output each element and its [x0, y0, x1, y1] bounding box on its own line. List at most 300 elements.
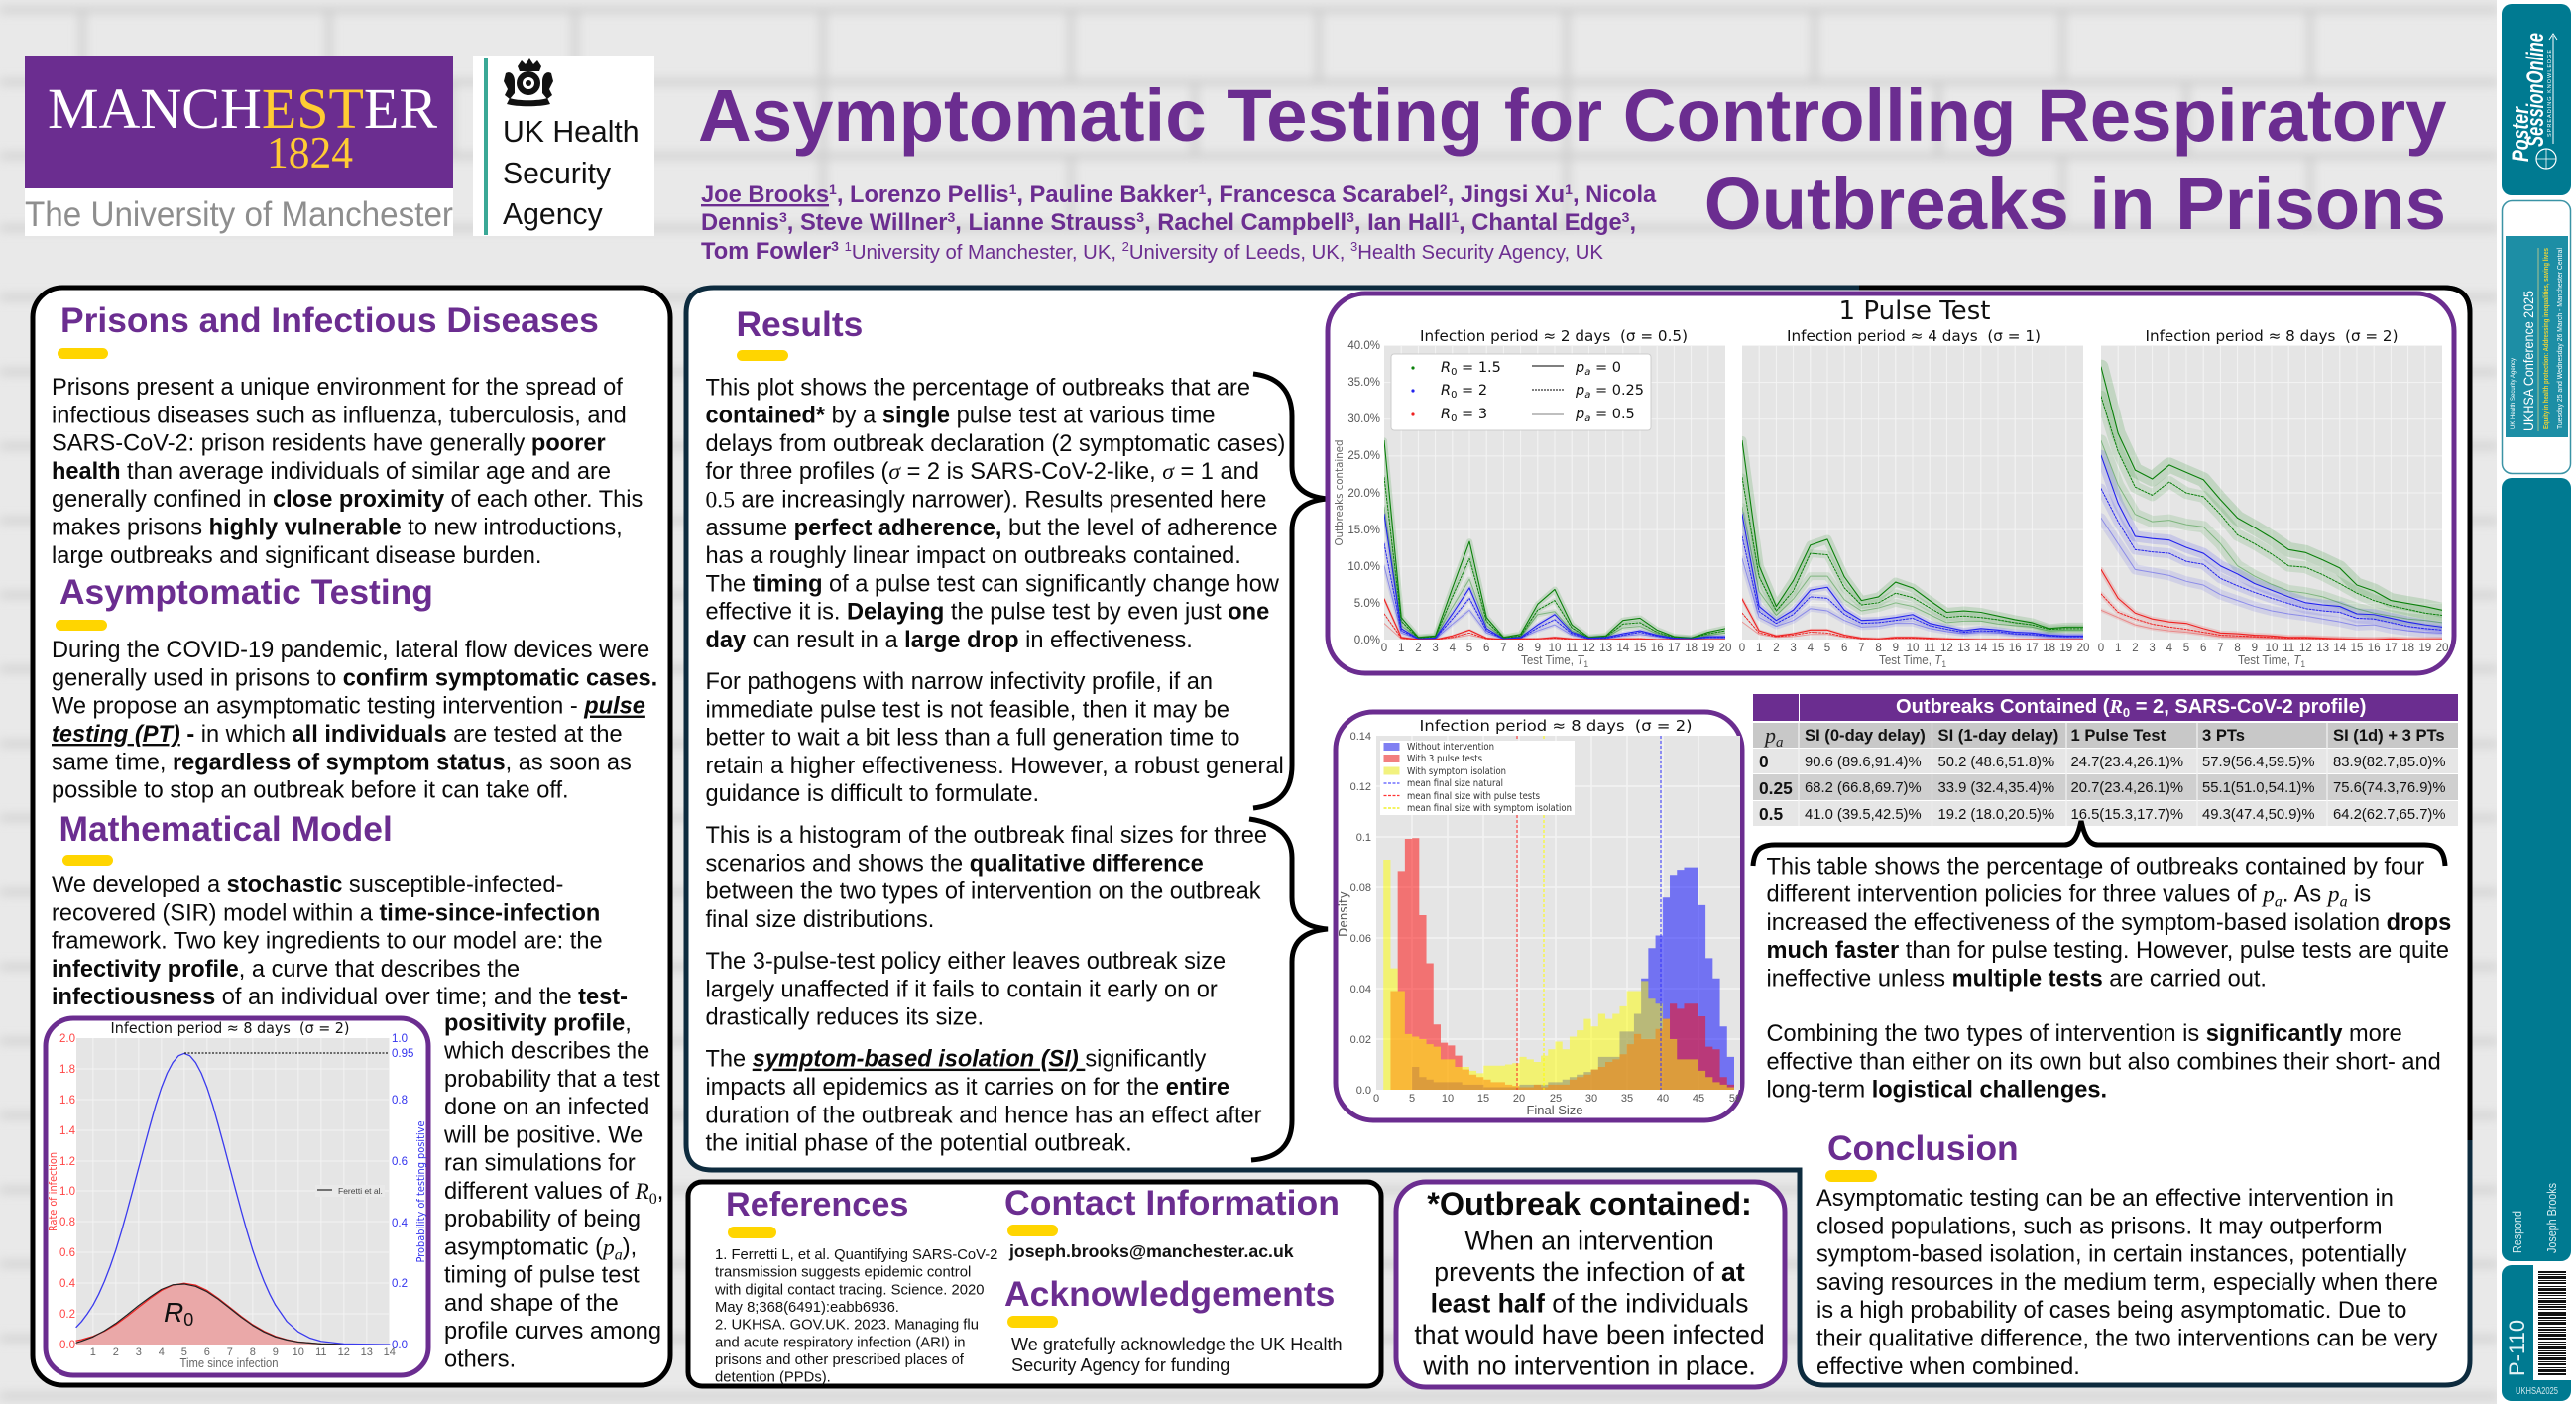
text block: table explanation: effective than either on its own but also combines their short- and — [1767, 1049, 2441, 1075]
chart: infectivity and test positivity profile: 0.2 — [392, 1278, 408, 1290]
chart: infectivity and test positivity profile: 0.6 — [392, 1156, 408, 1168]
authors: 3 — [831, 238, 839, 254]
sidebar: poster session online badge — [2502, 4, 2571, 195]
chart: infectivity and test positivity profile: 7 — [227, 1346, 233, 1358]
y axis labels: 30.0% — [1347, 413, 1380, 425]
text block: mathematical model: infectiousness of an individual over time; and the test- — [52, 985, 628, 1010]
chart: infectivity and test positivity profile: 0.4 — [392, 1218, 409, 1229]
table: outbreaks contained: SI (1d) + 3 PTs — [2333, 726, 2445, 745]
title: Outbreaks in Prisons — [1704, 163, 2446, 245]
authors: , Rachel Campbell — [1144, 210, 1347, 236]
y axis labels: 5.0% — [1354, 598, 1380, 610]
chart: final size histogram: 25 — [1550, 1093, 1562, 1105]
chart: infectivity and test positivity profile: 0.4 — [59, 1278, 76, 1290]
text block: mathematical model: recovered (SIR) model within a time-since-infection — [52, 900, 600, 926]
chart: final size histogram: Final Size — [1526, 1103, 1583, 1117]
chart: final size histogram: Infection period ≈ 8 days (σ = 2) — [1420, 717, 1692, 735]
callout: outbreak contained definition: *Outbreak contained: — [1427, 1186, 1752, 1222]
icon: barcode — [2538, 1271, 2566, 1375]
text block: table explanation: long-term logistical challenges. — [1767, 1077, 2107, 1103]
sidebar: respond badge: Respond — [2510, 1211, 2524, 1253]
text block: pulse test plot explanation: contained* by a single pulse test at various time — [706, 404, 1216, 429]
text block: mathematical model: different values of R — [444, 1179, 649, 1205]
authors: 1 — [829, 181, 837, 197]
chart: infectivity and test positivity profile: 1.4 — [59, 1125, 76, 1137]
subplot sigma 1 — [1739, 345, 2089, 669]
text: email: joseph.brooks@manchester.ac.uk — [1008, 1241, 1294, 1261]
chart: final size histogram: 0.12 — [1350, 781, 1371, 793]
sidebar: poster number and barcode: P-110 — [2505, 1320, 2529, 1376]
text block: references: 2. UKHSA. GOV.UK. 2023. Managing flu — [715, 1318, 979, 1334]
table: outbreaks contained: SI (1-day delay) — [1937, 726, 2058, 745]
text block: histogram explanation: impacts all epidemics as it carries on for the entire — [706, 1075, 1229, 1101]
authors: University of Leeds, UK, — [1129, 242, 1350, 264]
chart: final size histogram: 35 — [1621, 1093, 1633, 1105]
legend: a — [1584, 367, 1590, 378]
legend: a — [1584, 390, 1590, 401]
table: outbreaks contained: 68.2 (66.8,69.7)% — [1805, 780, 1922, 796]
text block: mathematical model: and shape of the — [444, 1291, 619, 1317]
sidebar: UKHSA conference badge: UK Health Security Agency — [2511, 358, 2517, 429]
text block: table explanation: is — [2348, 882, 2371, 908]
text block: prisons: Prisons present a unique environment for the spread of — [52, 375, 623, 401]
title — [698, 74, 2447, 245]
logo: University of Manchester — [25, 56, 453, 236]
heading: Acknowledgements: Acknowledgements — [1004, 1274, 1335, 1314]
text block: pulse test plot explanation: for three profiles (σ = 2 is SARS-CoV-2-like, σ = 1 and — [706, 459, 1259, 485]
text block: mathematical model: probability of being — [444, 1207, 641, 1232]
heading: Asymptomatic Testing — [56, 572, 433, 631]
chart: 1 pulse test line plots: Infection period ≈ 2 days (σ = 0.5) — [1420, 327, 1688, 345]
authors: , Steve Willner — [787, 210, 948, 236]
text block: asymptomatic testing — [52, 638, 657, 804]
authors: 2 — [1440, 181, 1448, 197]
authors: 3 — [779, 209, 787, 225]
subplot sigma 1: 1 — [1941, 659, 1946, 669]
histogram legend: With symptom isolation — [1407, 766, 1506, 777]
text block: table explanation: much faster than for pulse testing. However, pulse tests are quite — [1767, 938, 2449, 964]
text block: prisons: SARS-CoV-2: prison residents have generally poorer — [52, 431, 606, 457]
subplot sigma 0.5 — [1381, 345, 1731, 669]
chart: final size histogram: 40 — [1657, 1093, 1669, 1105]
authors: , Lianne Strauss — [955, 210, 1136, 236]
text block: mathematical model: done on an infected — [444, 1095, 649, 1120]
text block: asymptomatic testing: generally used in prisons to confirm symptomatic cases. — [52, 665, 657, 691]
text block: mathematical model: a — [615, 1246, 623, 1263]
chart: 1 pulse test line plots: Outbreaks contained — [1333, 440, 1346, 545]
text block: mathematical model: We developed a stochastic susceptible-infected- — [52, 873, 563, 898]
arrow: brace under table — [1753, 821, 2445, 866]
chart: infectivity and test positivity profile: 2.0 — [59, 1033, 75, 1045]
heading: Prisons and Infectious Diseases: Prisons and Infectious Diseases — [60, 300, 599, 340]
chart: infectivity and test positivity profile: R — [164, 1297, 183, 1328]
chart: 1 pulse test line plots: Infection period ≈ 8 days (σ = 2) — [2146, 327, 2398, 345]
table: outbreaks contained: 64.2(62.7,65.7)% — [2333, 807, 2446, 823]
callout: outbreak contained definition: least half of the individuals — [1431, 1289, 1748, 1319]
table: outbreaks contained: 50.2 (48.6,51.8)% — [1937, 755, 2054, 770]
table: outbreaks contained: Outbreaks Contained (R — [1896, 696, 2123, 718]
heading: Contact Information: Contact Information — [1004, 1183, 1340, 1223]
text block: acknowledgements — [1011, 1335, 1343, 1375]
chart: final size histogram: 0.0 — [1356, 1085, 1371, 1097]
histogram legend: With 3 pulse tests — [1407, 754, 1482, 764]
text block: conclusion: their qualitative difference, the two interventions can be very — [1816, 1327, 2438, 1352]
chart: final size histogram: 5 — [1409, 1093, 1415, 1105]
authors: , Nicola — [1573, 182, 1657, 208]
legend: = 1.5 — [1457, 360, 1501, 376]
text block: table explanation: . As — [2283, 882, 2328, 908]
text block: table explanation: Combining the two types of intervention is significantly more — [1767, 1021, 2402, 1047]
table: outbreaks contained: 0 — [1759, 752, 1769, 771]
text block: pulse test plot explanation: day can result in a large drop in effectiveness. — [706, 628, 1193, 653]
table: outbreaks contained: p — [1765, 723, 1776, 748]
chart: infectivity and test positivity profile: 9 — [273, 1346, 279, 1358]
y axis labels: 20.0% — [1347, 488, 1380, 500]
histogram legend: Without intervention — [1407, 742, 1494, 753]
legend — [1391, 354, 1651, 430]
text block: mathematical model: ran simulations for — [444, 1150, 636, 1176]
chart: infectivity and test positivity profile: 1.8 — [59, 1064, 75, 1076]
chart: final size histogram: 30 — [1585, 1093, 1597, 1105]
text block: asymptomatic testing: same time, regardless of symptom status, as soon as — [52, 750, 632, 775]
table: outbreaks contained: 1 Pulse Test — [2070, 726, 2166, 745]
text block: table explanation: increased the effectiveness of the symptom-based isolation drops — [1767, 910, 2451, 936]
logo: UK Health Security Agency: Agency — [503, 198, 604, 231]
chart: infectivity and test positivity profile: 8 — [250, 1346, 256, 1358]
authors: 3 — [1136, 209, 1144, 225]
authors: Joe Brooks — [701, 182, 829, 208]
text block: histogram explanation: scenarios and shows the qualitative difference — [706, 851, 1204, 877]
chart: infectivity and test positivity profile: 1.0 — [392, 1033, 408, 1045]
legend: a — [1584, 413, 1590, 424]
table: outbreaks contained: 41.0 (39.5,42.5)% — [1805, 807, 1922, 823]
legend: = 0.5 — [1590, 407, 1635, 422]
text block: references: detention (PPDs). — [715, 1370, 831, 1386]
chart: infectivity and test positivity profile: Feretti et al. — [338, 1186, 383, 1196]
histogram legend — [1380, 741, 1575, 815]
text block: references: May 8;368(6491):eabb6936. — [715, 1300, 899, 1316]
legend: = 0.25 — [1590, 383, 1644, 399]
text block: conclusion: is a high probability of cases being asymptomatic. Due to — [1816, 1298, 2406, 1324]
table: outbreaks contained: 83.9(82.7,85.0)% — [2333, 755, 2446, 770]
authors: , Pauline Bakker — [1016, 182, 1198, 208]
text block: references: and acute respiratory infection (ARI) in — [715, 1335, 966, 1350]
authors: , Jingsi Xu — [1448, 182, 1565, 208]
text block: histogram explanation: between the two types of intervention on the outbreak — [706, 879, 1261, 905]
authors: 3 — [1350, 239, 1357, 254]
sidebar: respond badge: Joseph Brooks — [2544, 1183, 2559, 1253]
table: outbreaks contained: 33.9 (32.4,35.4)% — [1937, 780, 2054, 796]
subplot sigma 2 — [2098, 345, 2448, 669]
text block: table explanation: p — [2326, 882, 2340, 908]
text block: conclusion: symptom-based isolation, in certain instances, potentially — [1816, 1242, 2407, 1268]
text block: pulse test plot explanation: delays from outbreak declaration (2 symptomatic cases) — [706, 431, 1285, 457]
y axis labels: 35.0% — [1347, 377, 1380, 389]
text block: mathematical model: asymptomatic (p — [444, 1234, 615, 1260]
table: outbreaks contained: 16.5(15.3,17.7)% — [2070, 807, 2183, 823]
table: outbreaks contained: 0.5 — [1759, 804, 1784, 824]
text block: acknowledgements: Security Agency for funding — [1011, 1355, 1229, 1375]
legend: 0 — [1451, 367, 1457, 378]
text block: histogram explanation: duration of the outbreak and hence has an effect after — [706, 1103, 1262, 1128]
chart: 1 pulse test line plots: Infection period ≈ 4 days (σ = 1) — [1787, 327, 2041, 345]
text block: pulse test plot explanation: effective it is. Delaying the pulse test by even just one — [706, 600, 1269, 626]
logo: UK Health Security Agency: UK Health — [503, 116, 640, 149]
authors: , Ian Hall — [1354, 210, 1451, 236]
text block: histogram explanation: The symptom-based isolation (SI) significantly — [706, 1047, 1206, 1073]
logo: UK Health Security Agency — [473, 56, 654, 236]
arrow: brace to pulse test plot — [1253, 374, 1328, 808]
authors: 3 — [1347, 209, 1354, 225]
heading: Mathematical Model: Mathematical Model — [59, 809, 393, 849]
text block: histogram explanation — [706, 823, 1267, 1157]
text block: table explanation: a — [2340, 894, 2348, 910]
text block: histogram explanation: largely unaffected if it fails to contain it early on or — [706, 977, 1218, 1002]
text block: mathematical model: will be positive. We — [443, 1122, 643, 1148]
legend: 0 — [1451, 390, 1457, 401]
table: outbreaks contained: 55.1(51.0,54.1)% — [2202, 780, 2315, 796]
chart: final size histogram: 0.06 — [1350, 933, 1371, 945]
panel: results (L-shaped, includes conclusion) — [686, 288, 2470, 1385]
text block: histogram explanation: drastically reduces its size. — [706, 1005, 984, 1031]
legend: R — [1441, 407, 1451, 422]
text block: pulse test plot explanation: better to wait a bit less than a full generation time to — [706, 726, 1240, 752]
chart: final size histogram: 0.14 — [1350, 731, 1371, 743]
title: Asymptomatic Testing for Controlling Respiratory — [698, 74, 2447, 157]
text block: mathematical model: , — [657, 1179, 663, 1205]
panel: references, contact, acknowledgements — [688, 1182, 1381, 1386]
chart: 1 pulse test line plots — [1328, 293, 2454, 673]
chart: final size histogram: 0 — [1373, 1093, 1379, 1105]
heading: Results: Results — [736, 304, 863, 344]
sidebar: poster session online badge: Poster — [2508, 106, 2534, 162]
chart: infectivity and test positivity profile: 14 — [384, 1346, 396, 1358]
text block: mathematical model: probability that a test — [444, 1067, 660, 1093]
text block: mathematical model: positivity profile, — [444, 1010, 632, 1036]
logo: University of Manchester: The University of Manchester — [25, 195, 453, 234]
authors: 3 — [948, 209, 956, 225]
callout: outbreak contained definition: with no intervention in place. — [1422, 1351, 1756, 1381]
y axis labels: 40.0% — [1347, 340, 1380, 352]
table: outbreaks contained: 0 — [2123, 705, 2130, 720]
text block: pulse test plot explanation — [706, 375, 1285, 807]
histogram legend: mean final size with pulse tests — [1407, 791, 1540, 802]
text block: prisons — [52, 375, 643, 569]
authors: , — [1629, 210, 1636, 236]
chart: infectivity and test positivity profile — [46, 1018, 428, 1375]
chart: infectivity and test positivity profile: 5 — [181, 1346, 187, 1358]
table: outbreaks contained — [1753, 694, 2458, 826]
text block: histogram explanation: final size distributions. — [706, 907, 934, 933]
callout: outbreak contained definition — [1396, 1182, 1785, 1387]
chart: infectivity and test positivity profile: 0.95 — [392, 1048, 413, 1060]
chart: infectivity and test positivity profile: Infection period ≈ 8 days (σ = 2) — [111, 1019, 349, 1037]
table: outbreaks contained: = 2, SARS-CoV-2 profile) — [2130, 696, 2367, 718]
y axis labels: 15.0% — [1347, 525, 1380, 536]
text block: histogram explanation: This is a histogram of the outbreak final sizes for three — [706, 823, 1267, 849]
authors: , Francesca Scarabel — [1206, 182, 1440, 208]
chart: infectivity and test positivity profile: 1.6 — [59, 1095, 75, 1107]
chart: infectivity and test positivity profile: Probability of testing positive — [415, 1120, 427, 1263]
chart: 1 pulse test line plots: 1 Pulse Test — [1838, 296, 1991, 326]
legend: R — [1441, 383, 1451, 399]
chart: infectivity and test positivity profile: 1.2 — [59, 1156, 75, 1168]
authors: 1 — [1009, 181, 1017, 197]
text block: pulse test plot explanation: The timing of a pulse test can significantly change how — [706, 571, 1280, 597]
subplot sigma 2: Test Time, T — [2238, 653, 2301, 667]
text block: table explanation: ineffective unless multiple tests are carried out. — [1767, 966, 2267, 992]
chart: final size histogram: 10 — [1442, 1093, 1454, 1105]
text block: pulse test plot explanation: guidance is difficult to formulate. — [706, 781, 1039, 807]
text block: mathematical model: profile curves among — [444, 1319, 661, 1345]
table: outbreaks contained: a — [1776, 735, 1783, 751]
text block: pulse test plot explanation: For pathogens with narrow infectivity profile, if an — [706, 669, 1213, 695]
text block: asymptomatic testing: possible to stop an outbreak before it can take off. — [52, 778, 569, 804]
authors: 1 — [845, 239, 852, 254]
authors: 1 — [1565, 181, 1573, 197]
icon: royal crest — [504, 58, 553, 106]
y axis labels — [1347, 340, 1380, 646]
text block: mathematical model: framework. Two key ingredients to our model are: the — [52, 929, 603, 955]
chart: infectivity and test positivity profile: 6 — [204, 1346, 210, 1358]
subplot sigma 0.5: Test Time, T — [1521, 653, 1584, 667]
text block: conclusion: saving resources in the medium term, especially when there — [1816, 1270, 2438, 1296]
chart: infectivity and test positivity profile: 0 — [183, 1310, 193, 1330]
chart: final size histogram: 50 — [1729, 1093, 1741, 1105]
chart: final size histogram: 20 — [1513, 1093, 1525, 1105]
chart: infectivity and test positivity profile: 0.0 — [59, 1340, 75, 1351]
text block: prisons: infectious diseases such as influenza, tuberculosis, and — [52, 403, 627, 428]
sidebar: UKHSA conference badge: UKHSA Conference 2025 — [2520, 291, 2536, 431]
subplot sigma 1: Test Time, T — [1879, 653, 1942, 667]
text block: prisons: large outbreaks and significant disease burden. — [52, 543, 541, 569]
chart: infectivity and test positivity profile: 2 — [113, 1346, 119, 1358]
callout: outbreak contained definition: When an intervention — [1464, 1227, 1714, 1256]
legend: = 2 — [1457, 383, 1487, 399]
table: outbreaks contained: 20.7(23.4,26.1)% — [2070, 780, 2183, 796]
chart: infectivity and test positivity profile: 10 — [293, 1346, 304, 1358]
sidebar: UKHSA conference badge: Equity in health protection: Addressing inequalities, saving lives — [2543, 248, 2550, 429]
y axis labels: 10.0% — [1347, 561, 1380, 573]
sidebar: UKHSA conference badge: Tuesday 25 and Wednesday 26 March - Manchester Central — [2557, 248, 2564, 429]
subplot sigma 0.5: 1 — [1583, 659, 1588, 669]
text block: pulse test plot explanation: This plot shows the percentage of outbreaks that are — [706, 375, 1250, 401]
table: outbreaks contained: 24.7(23.4,26.1)% — [2070, 755, 2183, 770]
sidebar: poster number and barcode: UKHSA2025 — [2516, 1386, 2558, 1397]
authors: Tom Fowler — [701, 239, 831, 265]
chart: infectivity and test positivity profile: 3 — [136, 1346, 142, 1358]
chart: final size histogram: 0.04 — [1350, 984, 1371, 995]
chart: infectivity and test positivity profile: 0.8 — [59, 1217, 75, 1228]
callout: outbreak contained definition: that would have been infected — [1414, 1320, 1765, 1349]
chart: infectivity and test positivity profile: 4 — [159, 1346, 165, 1358]
text block: references: prisons and other prescribed places of — [715, 1352, 965, 1368]
text block: pulse test plot explanation: immediate pulse test is not feasible, then it may be — [706, 697, 1229, 723]
text block: mathematical model — [52, 873, 663, 1372]
logo: University of Manchester: 1824 — [267, 128, 353, 177]
text block: table explanation: different intervention policies for three values of p — [1767, 882, 2275, 908]
heading: Asymptomatic Testing: Asymptomatic Testing — [59, 572, 433, 612]
authors: University of Manchester, UK, — [852, 242, 1122, 264]
panel: introduction, asymptomatic testing, model — [33, 288, 670, 1385]
text block: mathematical model: 0 — [649, 1191, 657, 1208]
text block: prisons: generally confined in close proximity of each other. This — [52, 487, 643, 513]
callout: outbreak contained definition: prevents the infection of at — [1434, 1257, 1745, 1287]
chart: final size histogram — [1336, 712, 1742, 1120]
text block: pulse test plot explanation: 0.5 are increasingly narrower). Results presented here — [706, 488, 1266, 514]
text block: asymptomatic testing: During the COVID-19 pandemic, lateral flow devices were — [52, 638, 649, 663]
text block: table explanation — [1767, 855, 2451, 1103]
legend: = 0 — [1590, 360, 1621, 376]
table: outbreaks contained: 75.6(74.3,76.9)% — [2333, 780, 2446, 796]
chart: infectivity and test positivity profile: 0.8 — [392, 1095, 408, 1107]
chart: infectivity and test positivity profile: 11 — [315, 1346, 327, 1358]
text block: prisons: health than average individuals of similar age and are — [52, 459, 611, 485]
table: outbreaks contained: SI (0-day delay) — [1805, 726, 1926, 745]
text block: histogram explanation: the initial phase of the potential outbreak. — [706, 1131, 1132, 1157]
table: outbreaks contained: 49.3(47.4,50.9)% — [2202, 807, 2315, 823]
chart: infectivity and test positivity profile: 0.0 — [392, 1340, 408, 1351]
text block: conclusion — [1816, 1186, 2438, 1380]
heading: Conclusion: Conclusion — [1827, 1128, 2019, 1168]
chart: final size histogram: Density — [1337, 891, 1350, 937]
sidebar: poster number and barcode — [2502, 1265, 2573, 1401]
legend: 0 — [1451, 413, 1457, 424]
sidebar: poster session online badge: SPREADING KNOWLEDGE — [2547, 50, 2553, 137]
chart: infectivity and test positivity profile: 1.0 — [59, 1186, 75, 1198]
chart: infectivity and test positivity profile: 12 — [338, 1346, 350, 1358]
chart: infectivity and test positivity profile: 0.6 — [59, 1247, 75, 1259]
chart: final size histogram: 0.1 — [1356, 832, 1371, 844]
chart: final size histogram: 45 — [1693, 1093, 1704, 1105]
legend: p — [1575, 407, 1584, 422]
histogram legend: mean final size natural — [1407, 778, 1503, 789]
authors: , Chantal Edge — [1459, 210, 1622, 236]
table: outbreaks contained: 3 PTs — [2202, 726, 2245, 745]
authors: 1 — [1451, 209, 1459, 225]
legend: = 3 — [1457, 407, 1487, 422]
text block: pulse test plot explanation: assume perfect adherence, but the level of adherence — [706, 516, 1278, 541]
sidebar: UKHSA conference badge — [2503, 200, 2570, 474]
heading: Prisons and Infectious Diseases — [58, 300, 599, 359]
chart: infectivity and test positivity profile: 1 — [90, 1346, 96, 1358]
legend: p — [1575, 360, 1584, 376]
text block: asymptomatic testing: testing (PT) - in which all individuals are tested at the — [52, 722, 623, 748]
histogram legend: mean final size with symptom isolation — [1407, 803, 1572, 814]
text block: conclusion: Asymptomatic testing can be an effective intervention in — [1816, 1186, 2394, 1212]
table: outbreaks contained: 0.25 — [1759, 778, 1793, 798]
chart: infectivity and test positivity profile: Time since infection — [180, 1356, 279, 1370]
table: outbreaks contained: 90.6 (89.6,91.4)% — [1805, 755, 1922, 770]
text block: asymptomatic testing: We propose an asymptomatic testing intervention - pulse — [52, 694, 645, 720]
text block: mathematical model: infectivity profile, a curve that describes the — [52, 957, 520, 983]
chart: infectivity and test positivity profile: Rate of infection — [48, 1152, 59, 1231]
chart: final size histogram: 0.08 — [1350, 882, 1371, 894]
text block: pulse test plot explanation: retain a higher effectiveness. However, a robust general — [706, 754, 1284, 779]
subplot sigma 2: 1 — [2300, 659, 2305, 669]
table: outbreaks contained: 19.2 (18.0,20.5)% — [1937, 807, 2054, 823]
text block: acknowledgements: We gratefully acknowledge the UK Health — [1011, 1335, 1343, 1354]
text block: mathematical model: which describes the — [443, 1039, 649, 1065]
authors — [701, 181, 1657, 265]
chart: infectivity and test positivity profile: 13 — [361, 1346, 373, 1358]
authors: 1 — [1198, 181, 1206, 197]
legend: R — [1441, 360, 1451, 376]
authors: 3 — [1622, 209, 1630, 225]
table: outbreaks contained: 57.9(56.4,59.5)% — [2202, 755, 2315, 770]
logo: UK Health Security Agency: Security — [503, 158, 612, 190]
text block: mathematical model: timing of pulse test — [444, 1263, 640, 1289]
